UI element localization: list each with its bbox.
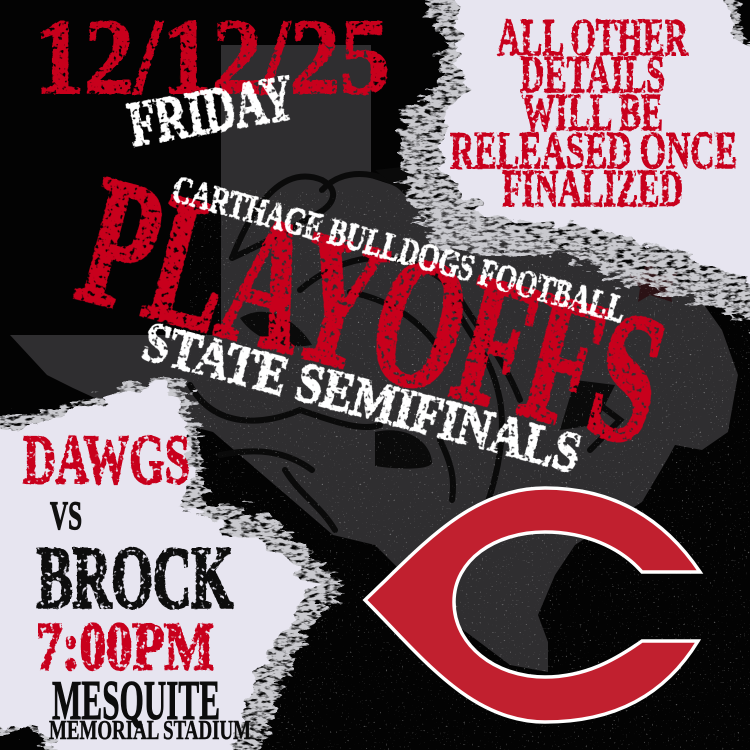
star (628, 258, 678, 302)
details notice: WILL BE (522, 84, 663, 142)
kickoff time: 7:00PM (36, 608, 214, 684)
details notice: DETAILS (520, 46, 665, 104)
date: 12/12/25 (34, 0, 390, 117)
round: STATE SEMIFINALS (137, 311, 588, 486)
opponent: BROCK (37, 530, 233, 627)
brush panel: bottom left (0, 372, 345, 750)
venue (49, 670, 251, 745)
versus: VS (50, 493, 82, 538)
day: FRIDAY (123, 61, 299, 160)
home team: DAWGS (23, 422, 190, 499)
venue: MESQUITE (52, 670, 220, 732)
C logo (365, 488, 700, 722)
bulldog line art (190, 174, 620, 530)
dark snout shapes (240, 165, 615, 469)
speckle texture (190, 190, 750, 750)
venue: MEMORIAL STADIUM (49, 715, 251, 745)
brush panel: top right (400, 0, 750, 330)
details notice (450, 9, 737, 218)
